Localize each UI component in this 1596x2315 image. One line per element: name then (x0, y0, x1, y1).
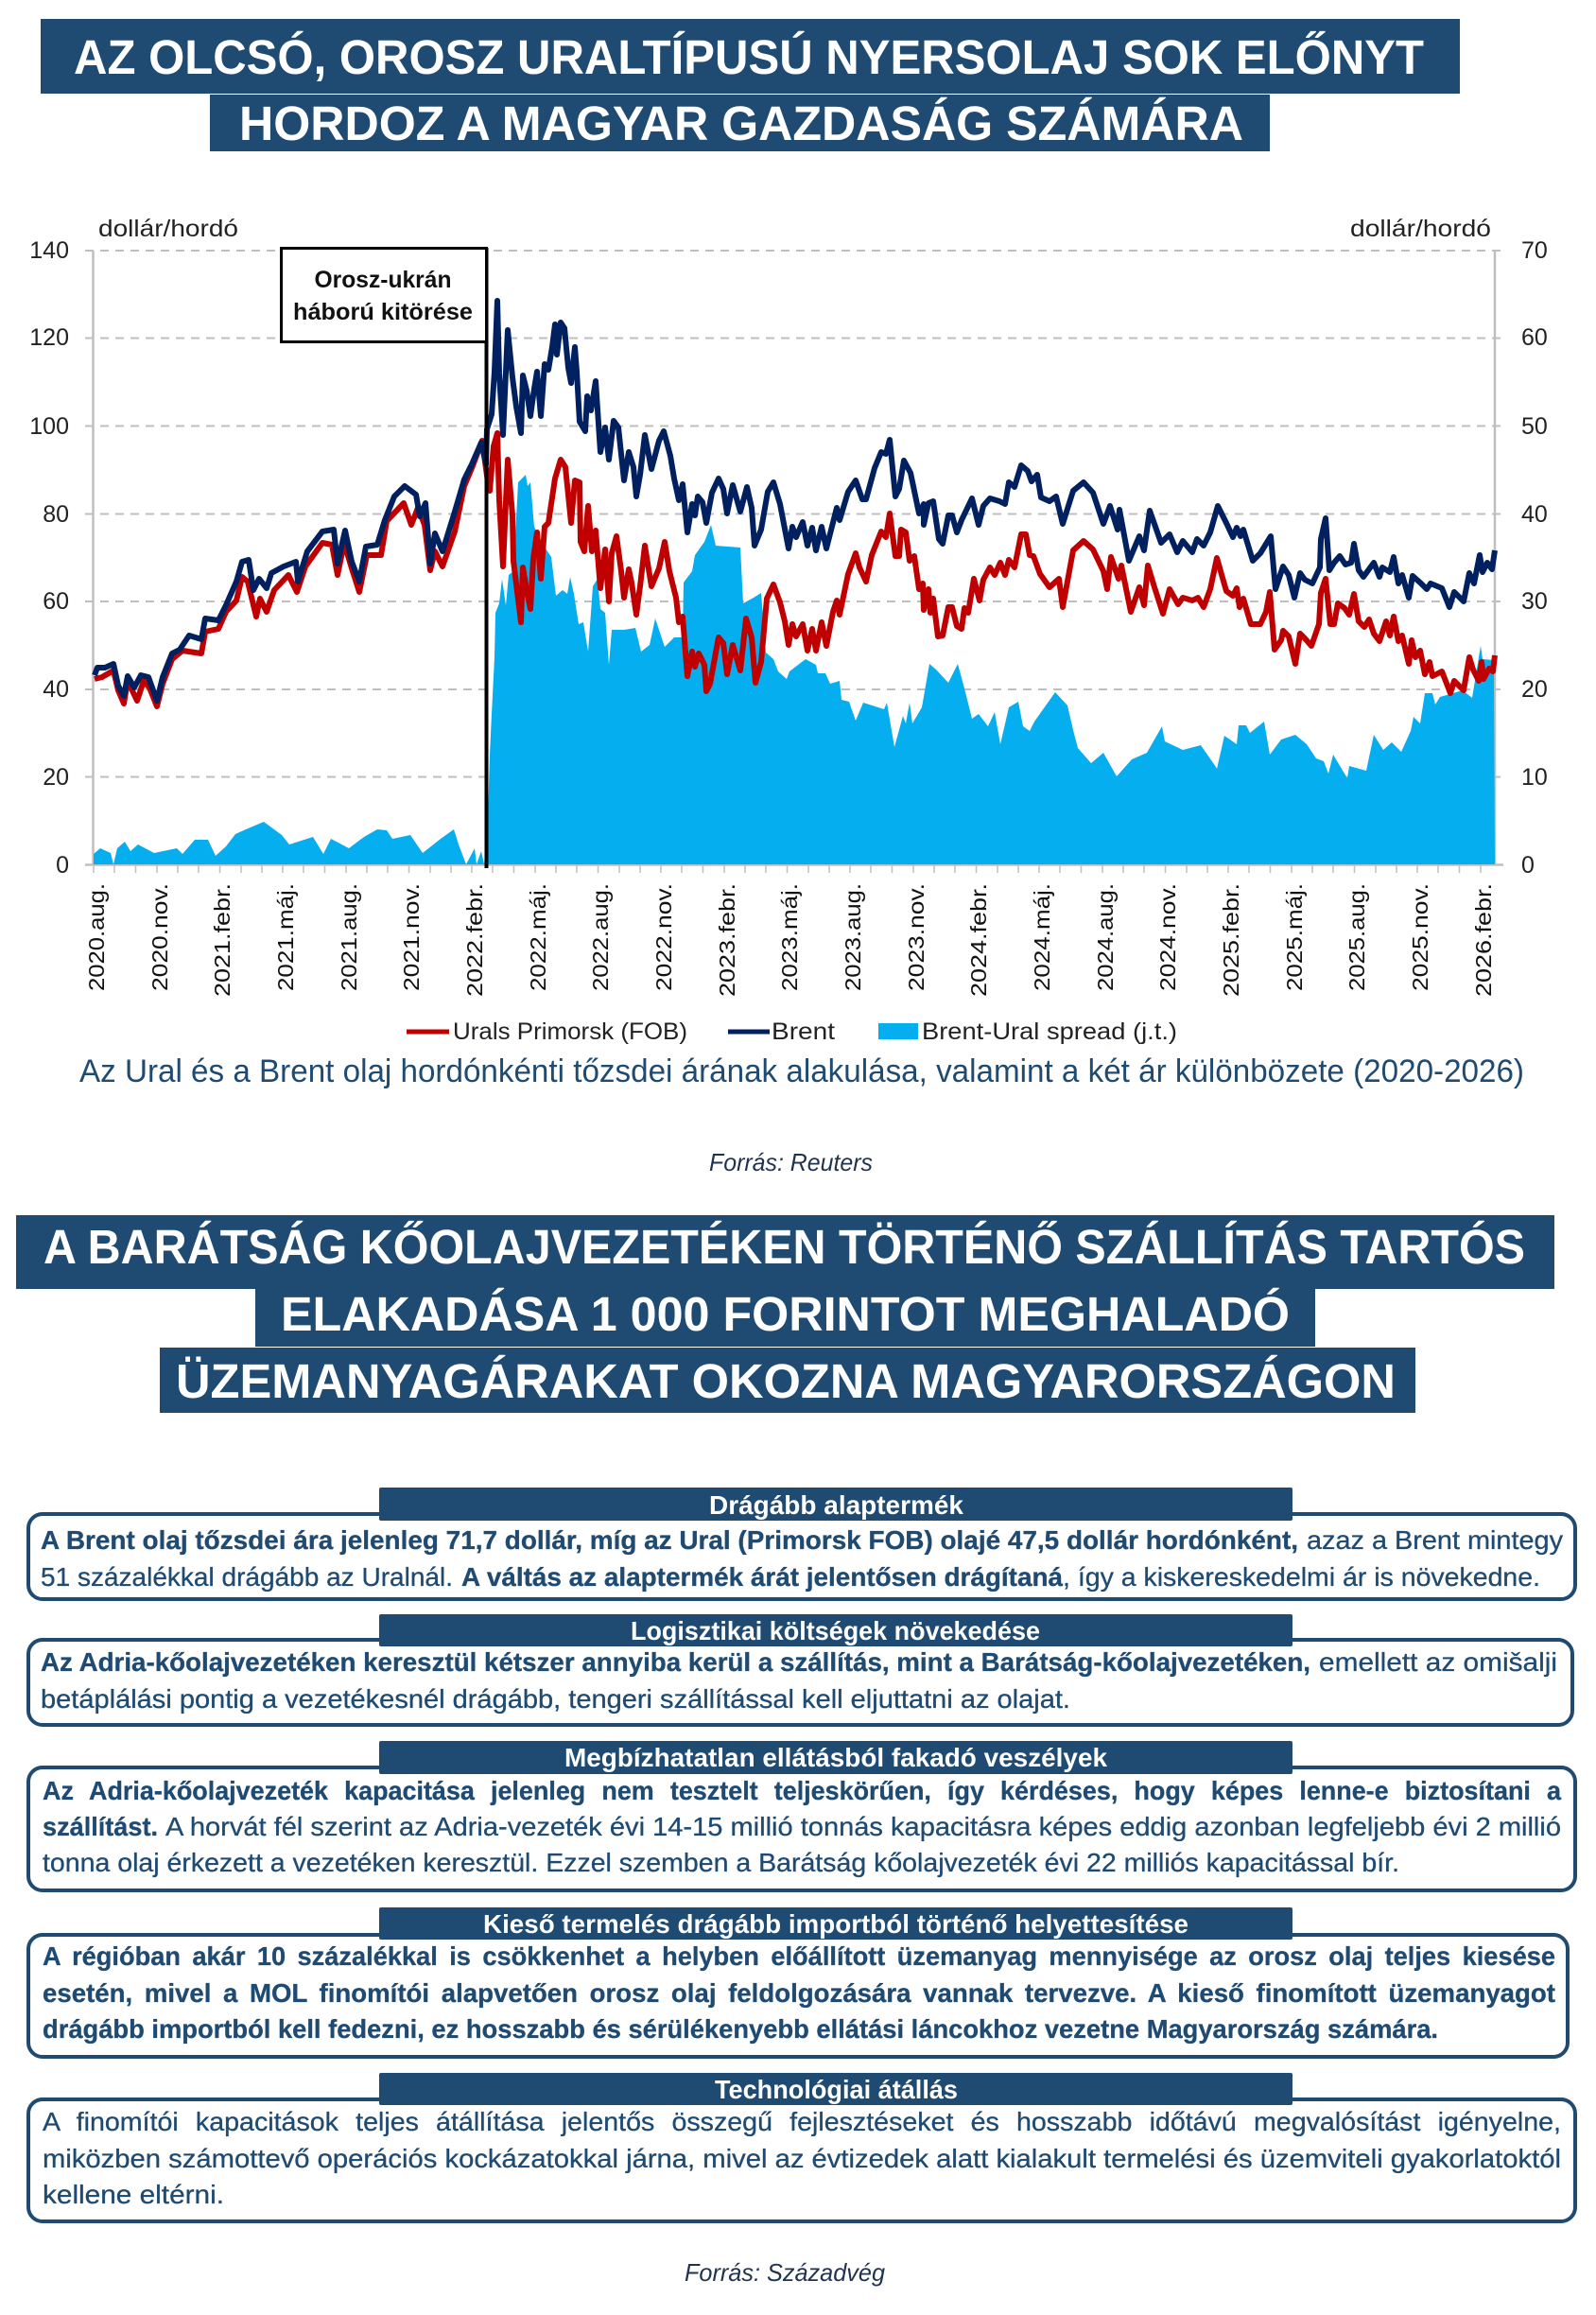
callout: war outbreak: háború kitörése (293, 299, 473, 325)
x axis labels: 2025.máj. (1282, 883, 1307, 991)
left axis labels: 0 (56, 852, 69, 879)
right axis unit: dollár/hordó (1350, 216, 1491, 242)
panel: Drágább alaptermék: A váltás az alaptermék árát jelentősen drágítaná (461, 1562, 1063, 1592)
right axis labels: 40 (1521, 501, 1548, 528)
x axis labels: 2024.aug. (1093, 883, 1118, 991)
panel: Megbízhatatlan ellátásból fakadó veszélyek: tonna olaj érkezett a vezetéken keresztül. Ezzel szemben a Barátság kőolajvezeték évi 22 milliós kapacitással bír. (43, 1848, 1399, 1877)
left axis labels: 20 (43, 764, 69, 791)
panel: Drágább alaptermék: , így a kiskereskedelmi ár is növekedne. (1063, 1562, 1540, 1592)
panel: Technológiai átállás (28, 2073, 1575, 2221)
line and area chart: Urals and Brent prices with spread (29, 216, 1548, 1045)
left axis labels: 140 (29, 237, 69, 264)
x axis labels: 2021.nov. (399, 883, 424, 991)
panel: Megbízhatatlan ellátásból fakadó veszélyek: szállítást. (43, 1812, 158, 1841)
x axis labels: 2022.aug. (588, 883, 613, 991)
panel: Logisztikai költségek növekedése (28, 1614, 1572, 1725)
x axis labels: 2023.aug. (841, 883, 865, 991)
x axis labels: 2023.máj. (777, 883, 802, 991)
panel: Technológiai átállás: A finomítói kapacitások teljes átállítása jelentős összegű fejlesztéseket és hosszabb időtávú megvalósítást igényelne, (43, 2107, 1561, 2136)
left axis labels: 100 (29, 413, 69, 440)
panel: Logisztikai költségek növekedése: emellett az omišalji (1319, 1647, 1557, 1677)
second heading (16, 1215, 1554, 1413)
left axis labels: 120 (29, 324, 69, 351)
panel: Megbízhatatlan ellátásból fakadó veszélyek: Az Adria-kőolajvezeték kapacitása jelenleg nem tesztelt teljeskörűen, így kérdéses, hogy képes lenne-e biztosítani a (43, 1776, 1561, 1805)
panel: Drágább alaptermék: azaz a Brent mintegy (1307, 1525, 1563, 1555)
left axis unit: dollár/hordó (98, 216, 238, 242)
right axis labels: 70 (1521, 237, 1548, 264)
area: Brent-Ural spread (94, 475, 1495, 864)
panel: Logisztikai költségek növekedése: Az Adria-kőolajvezetéken keresztül kétszer annyiba kerül a szállítás, mint a Barátság-kőolajvezetéken, (41, 1647, 1310, 1677)
right axis labels: 0 (1521, 852, 1535, 879)
legend (407, 1018, 1177, 1045)
line: Urals Primorsk (FOB) (95, 433, 1495, 706)
callout: war outbreak (282, 248, 486, 342)
line: Brent (95, 301, 1495, 701)
left axis labels: 60 (43, 588, 69, 615)
panel: Drágább alaptermék: 51 százalékkal drágább az Uralnál. (41, 1562, 453, 1592)
chart caption: Az Ural és a Brent olaj hordónkénti tőzsdei árának alakulása, valamint a két ár különbözete (2020-2026) (79, 1053, 1524, 1089)
x axis labels: 2026.febr. (1471, 883, 1496, 997)
x axis labels: 2020.aug. (84, 883, 109, 991)
panel: Megbízhatatlan ellátásból fakadó veszélyek (28, 1741, 1575, 1890)
panel: Technológiai átállás: miközben számottevő operációs kockázatokkal járna, mivel az évtizedek alatt kialakult termelési és üzemviteli gyakorlatoktól (43, 2144, 1561, 2173)
right axis labels (1521, 237, 1548, 879)
x axis labels: 2024.máj. (1030, 883, 1054, 991)
x axis labels (84, 883, 1496, 997)
left axis labels (29, 237, 69, 879)
callout: war outbreak: Orosz-ukrán (314, 267, 452, 293)
panel: Kieső termelés drágább importból történő helyettesítése (28, 1907, 1568, 2057)
marker: war outbreak vertical line (484, 248, 488, 868)
x axis labels: 2024.nov. (1155, 883, 1180, 991)
x axis labels: 2024.febr. (966, 883, 991, 997)
right axis labels: 30 (1521, 588, 1548, 615)
x axis labels: 2022.nov. (651, 883, 676, 991)
panel: Kieső termelés drágább importból történő helyettesítése: A régióban akár 10 százalékkal is csökkenhet a helyben előállított üzemanyag mennyisége az orosz olaj teljes kiesése (43, 1941, 1555, 1971)
panel: Kieső termelés drágább importból történő helyettesítése: esetén, mivel a MOL finomítói alapvetően orosz olaj feldolgozására vannak tervezve. A kieső finomított üzemanyagot (43, 1978, 1555, 2008)
right axis labels: 20 (1521, 676, 1548, 703)
panel: Logisztikai költségek növekedése: betáplálási pontig a vezetékesnél drágább, tengeri szállítással kell eljuttatni az olajat. (41, 1684, 1070, 1714)
right axis labels: 10 (1521, 764, 1548, 791)
title: top heading: AZ OLCSÓ, OROSZ URALTÍPUSÚ NYERSOLAJ SOK ELŐNYT (74, 29, 1424, 84)
source: Századvég: Forrás: Századvég (685, 2258, 886, 2287)
second heading: A BARÁTSÁG KŐOLAJVEZETÉKEN TÖRTÉNŐ SZÁLLÍTÁS TARTÓS (43, 1219, 1525, 1274)
second heading: ÜZEMANYAGÁRAKAT OKOZNA MAGYARORSZÁGON (176, 1354, 1396, 1408)
right axis labels: 60 (1521, 324, 1548, 351)
panel: Technológiai átállás: kellene eltérni. (43, 2180, 224, 2209)
legend: Urals Primorsk (FOB) (453, 1018, 687, 1045)
x axis labels: 2025.nov. (1408, 883, 1432, 991)
legend: Brent-Ural spread (j.t.) (922, 1018, 1177, 1045)
panel: Drágább alaptermék: A Brent olaj tőzsdei ára jelenleg 71,7 dollár, míg az Ural (Primorsk FOB) olajé 47,5 dollár hordónként, (41, 1525, 1298, 1555)
x axis labels: 2023.nov. (904, 883, 928, 991)
left axis labels: 80 (43, 501, 69, 528)
panel: Megbízhatatlan ellátásból fakadó veszélyek: A horvát fél szerint az Adria-vezeték évi 14-15 millió tonnás kapacitásra képes eddig azonban legfeljebb évi 2 millió (165, 1812, 1561, 1841)
panel: Drágább alaptermék: Drágább alaptermék (709, 1490, 963, 1520)
panel: Technológiai átállás: Technológiai átállás (715, 2075, 958, 2104)
second heading: ELAKADÁSA 1 000 FORINTOT MEGHALADÓ (281, 1287, 1290, 1341)
panel: Kieső termelés drágább importból történő helyettesítése: Kieső termelés drágább importból történő helyettesítése (483, 1909, 1188, 1939)
panel: Drágább alaptermék (28, 1488, 1575, 1599)
panel: Megbízhatatlan ellátásból fakadó veszélyek: Megbízhatatlan ellátásból fakadó veszélyek (564, 1743, 1107, 1772)
title: top heading: HORDOZ A MAGYAR GAZDASÁG SZÁMÁRA (239, 96, 1243, 150)
right axis labels: 50 (1521, 413, 1548, 440)
panel: Kieső termelés drágább importból történő helyettesítése: drágább importból kell fedezni, ez hosszabb és sérülékenyebb ellátási láncokhoz vezetne Magyarország számára. (43, 2014, 1438, 2044)
x axis labels: 2025.febr. (1219, 883, 1243, 997)
source: Reuters: Forrás: Reuters (709, 1148, 873, 1176)
x axis labels: 2021.febr. (210, 883, 234, 997)
x axis labels: 2022.febr. (462, 883, 487, 997)
x axis labels: 2023.febr. (715, 883, 739, 997)
title: top heading (41, 19, 1460, 151)
x axis labels: 2022.máj. (526, 883, 550, 991)
left axis labels: 40 (43, 676, 69, 703)
x axis labels: 2021.máj. (273, 883, 298, 991)
panel: Logisztikai költségek növekedése: Logisztikai költségek növekedése (631, 1616, 1040, 1645)
x axis labels: 2025.aug. (1344, 883, 1369, 991)
x axis labels: 2021.aug. (337, 883, 361, 991)
x axis labels: 2020.nov. (147, 883, 172, 991)
legend: Brent (772, 1018, 835, 1045)
